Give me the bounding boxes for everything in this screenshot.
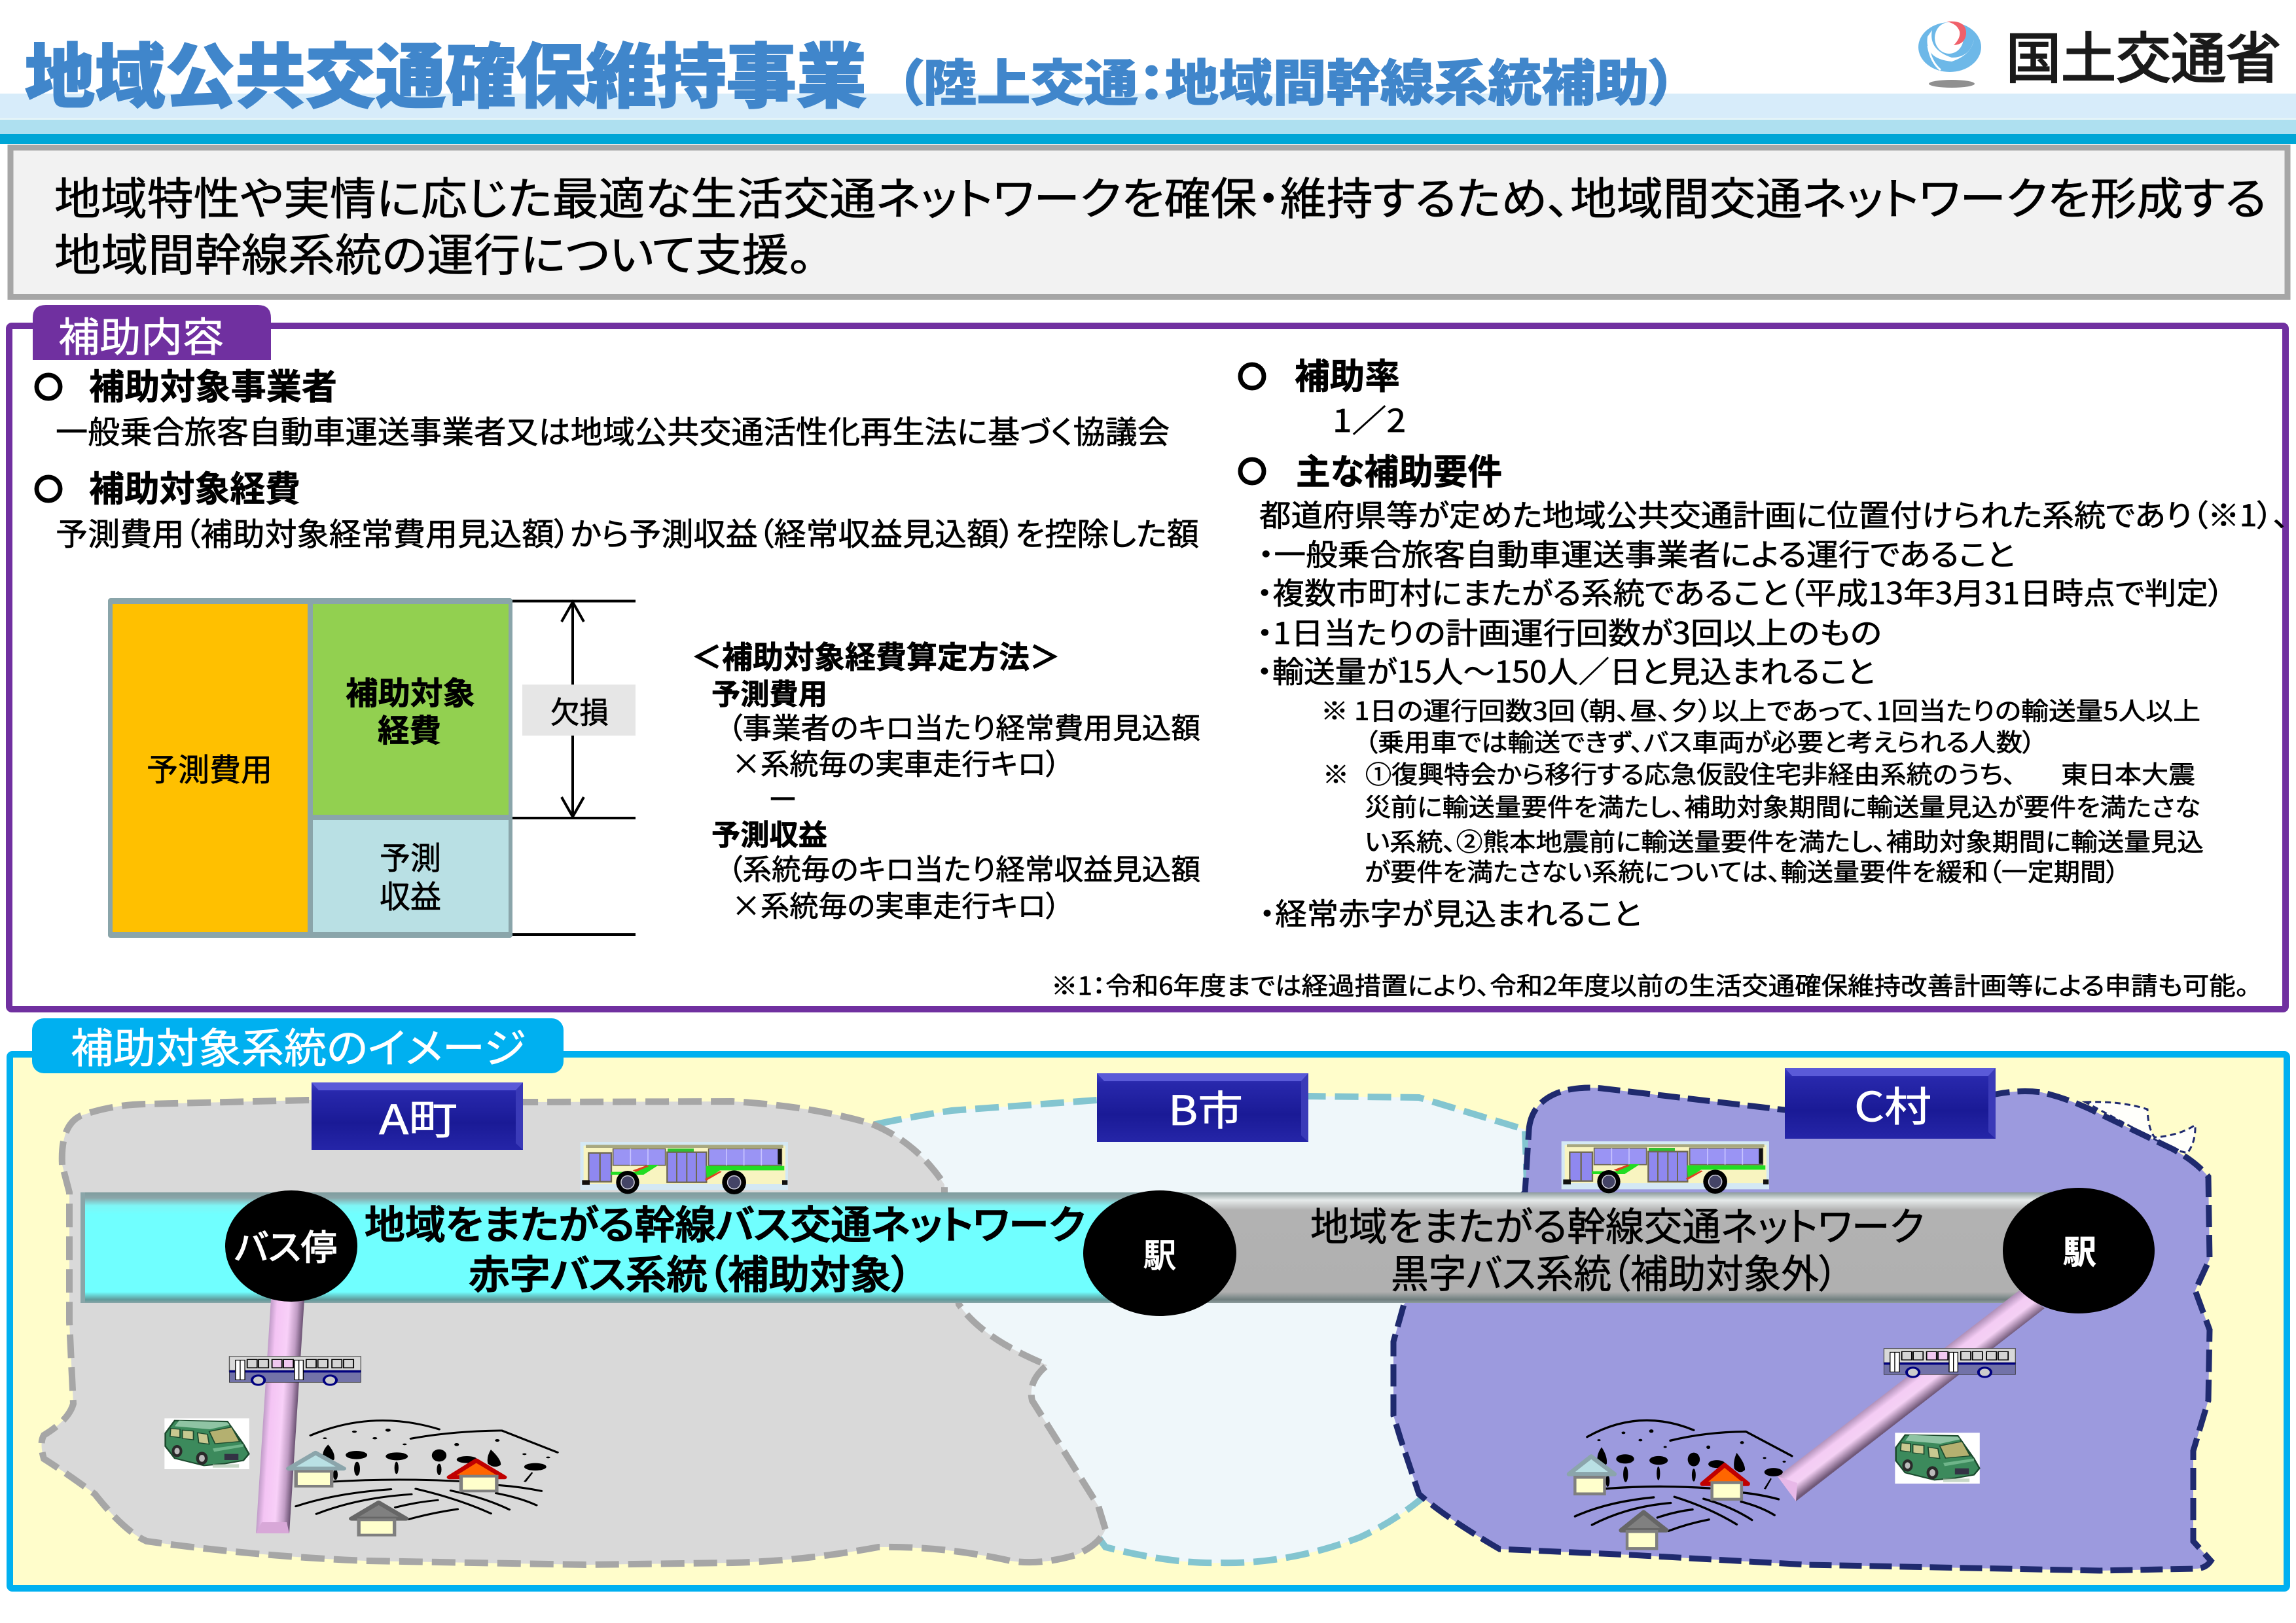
text: requirements list: 都道府県等が定めた地域公共交通計画に位置付けられた系統であり（※1）、 bbox=[1259, 492, 2289, 535]
text: footnote ※1: ※1：令和6年度までは経過措置により、令和2年度以前の生活交通確保維持改善計画等による申請も可能。 bbox=[1051, 966, 2249, 1002]
text: notes on transport volume: が要件を満たさない系統については、輸送量要件を緩和（一定期間） bbox=[1365, 852, 2119, 888]
label: A町 bbox=[312, 1082, 523, 1150]
icon: trunk bus A町 bbox=[581, 1142, 788, 1194]
bus route: 黒字バス系統: 黒字バス系統（補助対象外） bbox=[1391, 1243, 1838, 1300]
text: requirements list bbox=[1257, 492, 2289, 692]
icon: village scene C村 bbox=[1569, 1420, 1792, 1548]
logo: 国土交通省: 国土交通省 bbox=[2006, 15, 2281, 94]
text: notes on transport volume: ①復興特会から移行する応急仮設住宅非経由系統のうち、 bbox=[1365, 755, 2016, 791]
bus route: 赤字バス系統 bbox=[81, 1192, 1180, 1303]
text: 補助対象経費算定方法: 予測費用 bbox=[711, 671, 827, 713]
stop: 駅 (C村) bbox=[2003, 1188, 2155, 1313]
text: 補助対象経費算定方法: ×系統毎の実車走行キロ） bbox=[732, 741, 1060, 783]
text: 補助対象経費算定方法: ― bbox=[770, 776, 796, 818]
segment: 予測収益 bbox=[313, 820, 509, 932]
text: requirements list: ・輸送量が15人～150人／日と見込まれること bbox=[1257, 649, 1874, 692]
text: deficit requirement: ・経常赤字が見込まれること bbox=[1259, 891, 1641, 934]
panel: 補助対象系統のイメージ bbox=[10, 1016, 2287, 1588]
stop: バス停: バス停 bbox=[234, 1219, 337, 1270]
icon: bullet ring bbox=[37, 477, 60, 501]
heading: 補助率: 補助率 bbox=[1295, 348, 1400, 399]
icon: village scene A町 bbox=[289, 1421, 558, 1535]
segment: 予測費用 bbox=[113, 604, 308, 932]
text: 補助対象経費算定方法: ＜補助対象経費算定方法＞ bbox=[691, 632, 1060, 677]
icon: local bus C村 bbox=[1884, 1349, 2015, 1378]
bus route: 黒字バス系統: 地域をまたがる幹線交通ネットワーク bbox=[1310, 1196, 1924, 1253]
icon: bullet ring bbox=[37, 375, 60, 399]
text: 補助対象経費算定方法: （系統毎のキロ当たり経常収益見込額 bbox=[728, 846, 1200, 888]
heading: 補助対象事業者: 補助対象事業者 bbox=[89, 358, 337, 410]
text: notes on transport volume: い系統、②熊本地震前に輸送量要件を満たし、補助対象期間に輸送量見込 bbox=[1365, 822, 2204, 858]
chart: cost structure diagram bbox=[108, 598, 636, 938]
heading: 補助対象経費: 補助対象経費 bbox=[89, 460, 300, 512]
bus route: 赤字バス系統: 赤字バス系統（補助対象） bbox=[469, 1243, 912, 1300]
label: C村: C村 bbox=[1854, 1074, 1931, 1133]
icon: bullet ring bbox=[1240, 365, 1264, 388]
bracket: 欠損 arrow: 欠損 bbox=[550, 689, 609, 732]
stop: 駅 (B市) bbox=[1083, 1190, 1236, 1316]
text: requirements list: ・複数市町村にまたがる系統であること（平成13年3月31日時点で判定） bbox=[1257, 570, 2224, 613]
panel: summary statement bbox=[10, 148, 2287, 297]
text: 補助対象経費算定方法: 予測収益 bbox=[711, 812, 827, 853]
bracket: 欠損 arrow bbox=[512, 601, 636, 935]
icon: van C村 bbox=[1895, 1433, 1980, 1484]
header band bbox=[0, 94, 2296, 144]
segment: 予測収益: 予測 bbox=[380, 832, 441, 878]
icon: bullet ring bbox=[1240, 459, 1264, 483]
label: B市: B市 bbox=[1168, 1078, 1243, 1137]
map region: B市 bbox=[878, 1096, 1532, 1563]
text: notes on transport volume: ※ bbox=[1323, 755, 1349, 791]
feeder road: C村 bbox=[1778, 1291, 2045, 1501]
title: （陸上交通：地域間幹線系統補助） bbox=[896, 43, 1676, 115]
segment: 予測費用: 予測費用 bbox=[147, 744, 272, 790]
stop: 駅 (B市): 駅 bbox=[1143, 1230, 1176, 1277]
segment: 補助対象経費: 補助対象 bbox=[346, 668, 475, 713]
panel: summary statement: 地域間幹線系統の運行について支援。 bbox=[54, 219, 812, 284]
panel: summary statement: 地域特性や実情に応じた最適な生活交通ネットワークを確保・維持するため、地域間交通ネットワークを形成する bbox=[54, 163, 2267, 228]
text: notes on transport volume: ※ 1日の運行回数3回（朝、昼、夕）以上であって、1回当たりの輸送量5人以上 bbox=[1321, 691, 2200, 727]
icon: ministry emblem bbox=[1918, 22, 1981, 88]
heading: 主な補助要件: 主な補助要件 bbox=[1296, 443, 1502, 495]
text: 補助対象経費算定方法: （事業者のキロ当たり経常費用見込額 bbox=[728, 705, 1200, 747]
icon: trunk bus C村 bbox=[1562, 1141, 1769, 1194]
label: C村 bbox=[1785, 1068, 1996, 1139]
segment: 補助対象経費 bbox=[313, 604, 509, 815]
panel: 補助内容 bbox=[9, 304, 2289, 1009]
text: 1/2: 1／2 bbox=[1333, 395, 1406, 441]
text: notes on transport volume: 災前に輸送量要件を満たし、補助対象期間に輸送量見込が要件を満たさな bbox=[1365, 787, 2200, 823]
title bbox=[25, 20, 1676, 122]
text: requirements list: ・一般乗合旅客自動車運送事業者による運行であること bbox=[1258, 531, 2015, 575]
feeder road: A町 bbox=[256, 1299, 304, 1533]
segment: 補助対象経費: 経費 bbox=[378, 705, 441, 751]
text: notes on transport volume: （乗用車では輸送できず、バス車両が必要と考えられる人数） bbox=[1365, 722, 2036, 758]
stop: 駅 (C村): 駅 bbox=[2063, 1226, 2096, 1274]
text: notes on transport volume bbox=[1321, 691, 2204, 888]
text: 経費 description: 予測費用（補助対象経常費用見込額）から予測収益（経常収益見込額）を控除した額 bbox=[56, 508, 1199, 554]
tab heading: 補助内容: 補助内容 bbox=[58, 304, 224, 363]
label: B市 bbox=[1097, 1073, 1308, 1142]
bus route: 黒字バス系統 bbox=[1178, 1192, 2055, 1303]
title: 地域公共交通確保維持事業 bbox=[25, 20, 867, 122]
text: 事業者 description: 一般乗合旅客自動車運送事業者又は地域公共交通活性化再生法に基づく協議会 bbox=[56, 406, 1170, 452]
stop: バス停 bbox=[225, 1190, 357, 1302]
map region: A町 bbox=[42, 1100, 1105, 1565]
segment: 予測収益: 収益 bbox=[380, 871, 441, 917]
tab heading: 補助対象系統のイメージ: 補助対象系統のイメージ bbox=[71, 1016, 526, 1075]
text: 補助対象経費算定方法: ×系統毎の実車走行キロ） bbox=[732, 883, 1060, 925]
text: 補助対象経費算定方法 bbox=[691, 632, 1200, 925]
text: notes on transport volume: 東日本大震 bbox=[2061, 755, 2195, 791]
text: requirements list: ・1日当たりの計画運行回数が3回以上のもの bbox=[1257, 610, 1882, 653]
bus route: 赤字バス系統: 地域をまたがる幹線バス交通ネットワーク bbox=[365, 1194, 1085, 1251]
map region: C村 bbox=[1393, 1088, 2211, 1571]
icon: van A町 bbox=[164, 1418, 249, 1469]
icon: local bus A町 bbox=[229, 1357, 361, 1386]
tab heading: 補助内容 bbox=[33, 304, 271, 363]
label: A町: A町 bbox=[379, 1087, 457, 1146]
